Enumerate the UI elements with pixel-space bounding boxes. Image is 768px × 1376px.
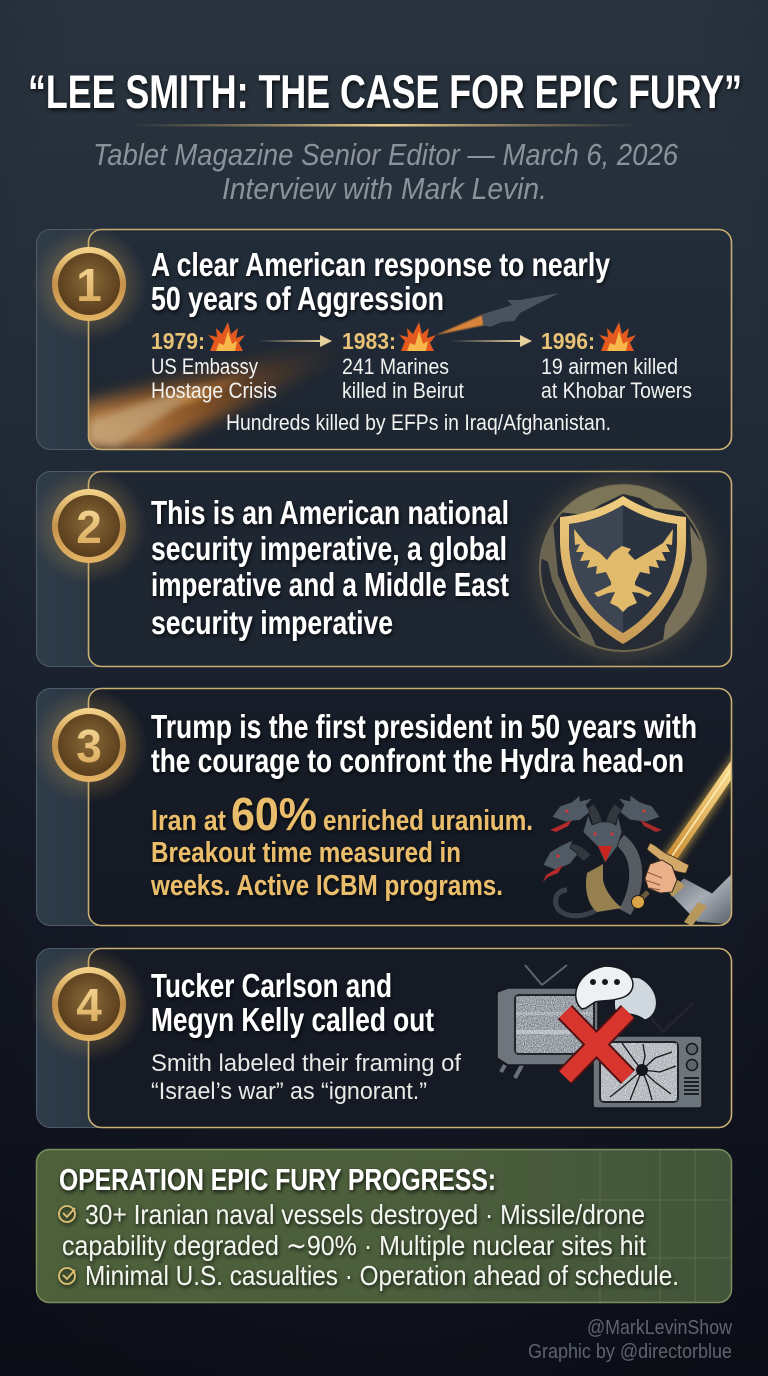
credits: Graphic by @directorblue (528, 1341, 732, 1363)
panel: card 1 aggression timeline (31, 226, 732, 450)
heading 2: security imperative, a global (151, 530, 507, 567)
heading 2 (151, 494, 509, 641)
checklist: Minimal U.S. casualties · Operation ahead of schedule. (85, 1260, 679, 1291)
timeline 1996: 1996: (541, 328, 595, 354)
body text 4 (151, 1050, 461, 1105)
timeline 1996: at Khobar Towers (541, 378, 692, 403)
icon: shield, eagle and globe (531, 476, 715, 660)
heading: progress: OPERATION EPIC FURY PROGRESS: (59, 1162, 496, 1197)
badge 3 (31, 687, 147, 803)
callout: uranium: 60% (231, 788, 317, 840)
timeline 1983: 1983: (342, 328, 396, 354)
heading 1: 50 years of Aggression (151, 280, 444, 317)
arrow 1979 to 1983 (258, 335, 332, 347)
timeline 1983: killed in Beirut (342, 378, 464, 403)
callout: uranium: Iran at (151, 805, 226, 837)
badge 2: 2 (76, 501, 102, 553)
heading 4: Tucker Carlson and (151, 967, 392, 1004)
heading 1: A clear American response to nearly (151, 246, 611, 283)
heading 4: Megyn Kelly called out (151, 1001, 434, 1038)
panel: card 2 security imperative (31, 468, 732, 666)
checklist (59, 1199, 679, 1291)
heading 4 (151, 967, 434, 1038)
badge 4 (31, 946, 147, 1062)
timeline 1983 (342, 322, 464, 403)
subtitle: Tablet Magazine Senior Editor — March 6, 2026 (93, 137, 679, 172)
note: EFPs: Hundreds killed by EFPs in Iraq/Afghanistan. (226, 410, 611, 435)
heading 1 (151, 246, 611, 317)
sword (646, 751, 731, 874)
credits: @MarkLevinShow (587, 1317, 732, 1339)
subtitle: Interview with Mark Levin. (222, 171, 547, 206)
heading 3 (151, 708, 697, 779)
callout: uranium: enriched uranium. (323, 805, 533, 837)
callout: uranium: Breakout time measured in (151, 837, 461, 869)
checklist: capability degraded ∼90% · Multiple nuclear sites hit (62, 1230, 646, 1261)
panel: card 4 media (31, 946, 732, 1128)
panel: operation progress (36, 1150, 732, 1302)
timeline 1983: 241 Marines (342, 354, 449, 379)
timeline 1979 (151, 322, 277, 403)
timeline 1979: US Embassy (151, 354, 258, 379)
icon: hydra and sword (543, 752, 745, 926)
hydra (543, 795, 662, 916)
callout: uranium: weeks. Active ICBM programs. (150, 870, 503, 902)
icon: missile with fire trail (80, 293, 559, 449)
badge 1 (31, 226, 147, 342)
badge 4: 4 (76, 979, 102, 1031)
badge 2 (31, 468, 147, 584)
timeline 1979: 1979: (151, 328, 205, 354)
panel: card 3 hydra (31, 687, 745, 926)
subtitle (93, 137, 679, 206)
timeline 1979: Hostage Crisis (151, 378, 277, 403)
icon: televisions with red X (497, 965, 702, 1108)
heading 2: security imperative (151, 604, 393, 641)
callout: uranium (150, 788, 533, 902)
timeline 1996: 19 airmen killed (541, 354, 678, 379)
body text 4: “Israel’s war” as “ignorant.” (151, 1078, 427, 1105)
checklist: 30+ Iranian naval vessels destroyed · Missile/drone (85, 1199, 645, 1230)
armoured hand (632, 860, 735, 926)
heading 2: This is an American national (151, 494, 509, 531)
arrow 1983 to 1996 (450, 335, 532, 347)
timeline 1996 (541, 322, 692, 403)
heading 2: imperative and a Middle East (151, 566, 509, 603)
credits (528, 1317, 732, 1363)
badge 1: 1 (76, 259, 102, 311)
badge 3: 3 (76, 720, 102, 772)
body text 4: Smith labeled their framing of (151, 1050, 461, 1077)
